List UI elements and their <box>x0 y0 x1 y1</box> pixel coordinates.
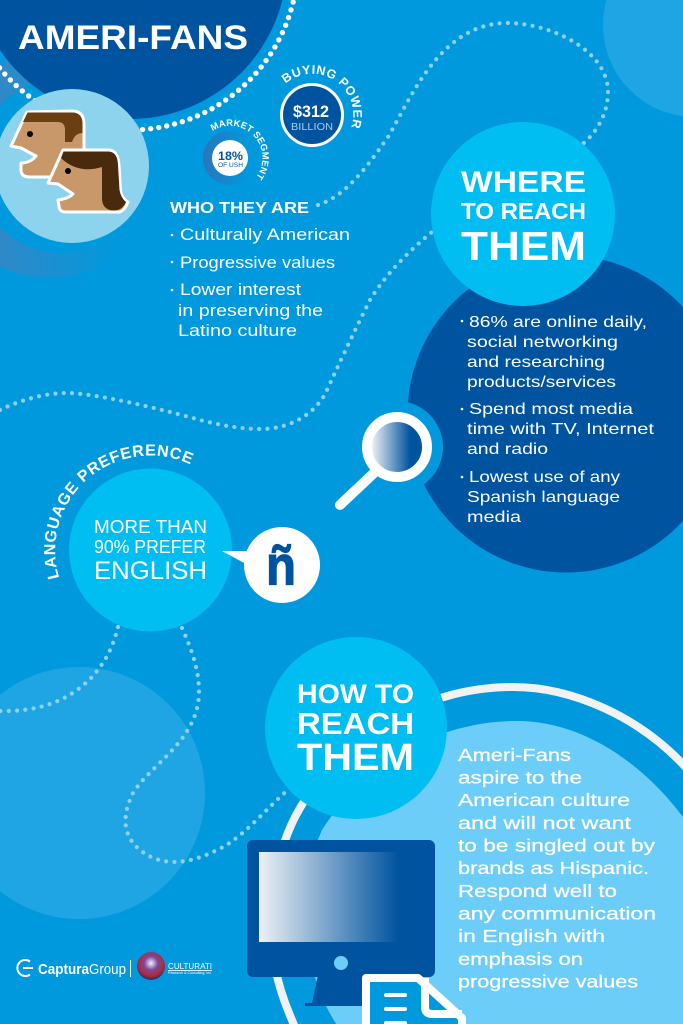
stat: buying power: $312 <box>293 102 329 121</box>
icon: speech bubble with n tilde: ñ <box>266 534 296 597</box>
panel: how to reach details: and will not want <box>458 813 631 833</box>
heading circle: where to reach them: WHERE <box>461 166 586 199</box>
panel: how to reach details: progressive values <box>458 972 638 992</box>
decorative light circle top right <box>603 0 683 117</box>
text block: who they are <box>170 200 350 340</box>
text block: who they are: Culturally American <box>180 226 350 244</box>
panel: where to reach details: and radio <box>467 441 548 458</box>
panel: how to reach details: emphasis on <box>458 949 583 969</box>
dotted connector: language to how circle <box>125 628 290 862</box>
panel: how to reach details: in English with <box>458 926 605 946</box>
language preference circle: 90% PREFER <box>94 536 206 557</box>
panel: how to reach details <box>271 687 683 1024</box>
icon: magnifying glass <box>340 401 443 505</box>
heading circle: how to reach them: REACH <box>297 706 414 741</box>
panel: how to reach details: American culture <box>458 790 630 810</box>
language preference circle: MORE THAN <box>94 516 207 537</box>
icon: speech bubble with n tilde <box>222 527 320 603</box>
logo: Culturati: Research & Consulting, Inc. <box>168 971 212 975</box>
stat: market segment: 18% <box>218 149 243 163</box>
icon: two faces in circle <box>0 89 149 243</box>
language preference circle <box>44 444 232 632</box>
text block: who they are: Latino culture <box>178 322 297 340</box>
panel: how to reach details: to be singled out by <box>458 836 655 856</box>
white dotted arc around title disc <box>0 0 298 130</box>
stat: market segment: OF USH <box>218 162 243 169</box>
panel: where to reach details: social networking <box>467 334 618 351</box>
panel: where to reach details: 86% are online daily, <box>469 314 647 331</box>
decorative light circle bottom left <box>0 667 205 919</box>
panel: how to reach details: brands as Hispanic. <box>458 858 649 878</box>
heading circle: where to reach them: THEM <box>461 223 586 269</box>
panel: where to reach details: and researching <box>467 354 605 371</box>
stat: buying power: BILLION <box>291 122 333 133</box>
panel: where to reach details: products/services <box>467 374 616 391</box>
panel: where to reach details: Spanish language <box>467 489 620 506</box>
logo: Culturati: CULTURATI <box>168 961 212 971</box>
panel: where to reach details: media <box>467 509 521 526</box>
icon: computer monitor <box>247 840 435 1006</box>
dotted connector: who they are to where <box>318 23 608 205</box>
panel: how to reach details: Respond well to <box>458 881 617 901</box>
language preference circle: ENGLISH <box>94 557 207 585</box>
logo: Culturati <box>137 952 212 980</box>
stat: market segment: MARKET SEGMENT <box>210 119 269 181</box>
language preference circle: LANGUAGE PREFERENCE <box>44 444 194 580</box>
title: AMERI-FANS <box>18 19 248 57</box>
icon: document <box>366 978 462 1024</box>
dotted connector: language to left edge <box>0 627 118 711</box>
heading circle: how to reach them: HOW TO <box>297 679 414 709</box>
panel: how to reach details: any communication <box>458 904 656 924</box>
heading circle: where to reach them: TO REACH <box>461 198 586 224</box>
logo: Captura Group: Captura <box>38 961 90 978</box>
panel: where to reach details: Lowest use of any <box>469 469 620 486</box>
gradient halo behind people <box>0 52 163 278</box>
text block: who they are: WHO THEY ARE <box>170 200 309 217</box>
logo: Captura Group: Group <box>89 961 126 978</box>
dotted connector: wave to where circle <box>0 232 432 429</box>
heading circle: how to reach them: THEM <box>297 737 414 779</box>
panel: how to reach details: Ameri-Fans <box>458 745 571 765</box>
title disc <box>0 0 287 119</box>
panel: where to reach details <box>408 256 683 572</box>
text block: who they are: Progressive values <box>180 254 335 272</box>
text block: who they are: in preserving the <box>178 302 323 320</box>
people backing ring <box>0 79 149 253</box>
stat: buying power: BUYING POWER <box>281 65 362 128</box>
text block: who they are: Lower interest <box>180 281 301 299</box>
panel: where to reach details: time with TV, Internet <box>467 421 655 438</box>
panel: how to reach details: aspire to the <box>458 768 582 788</box>
heading circle: how to reach them <box>265 637 447 819</box>
heading circle: where to reach them <box>431 122 615 306</box>
panel: where to reach details: Spend most media <box>469 401 633 418</box>
logo: Captura Group <box>17 960 131 978</box>
